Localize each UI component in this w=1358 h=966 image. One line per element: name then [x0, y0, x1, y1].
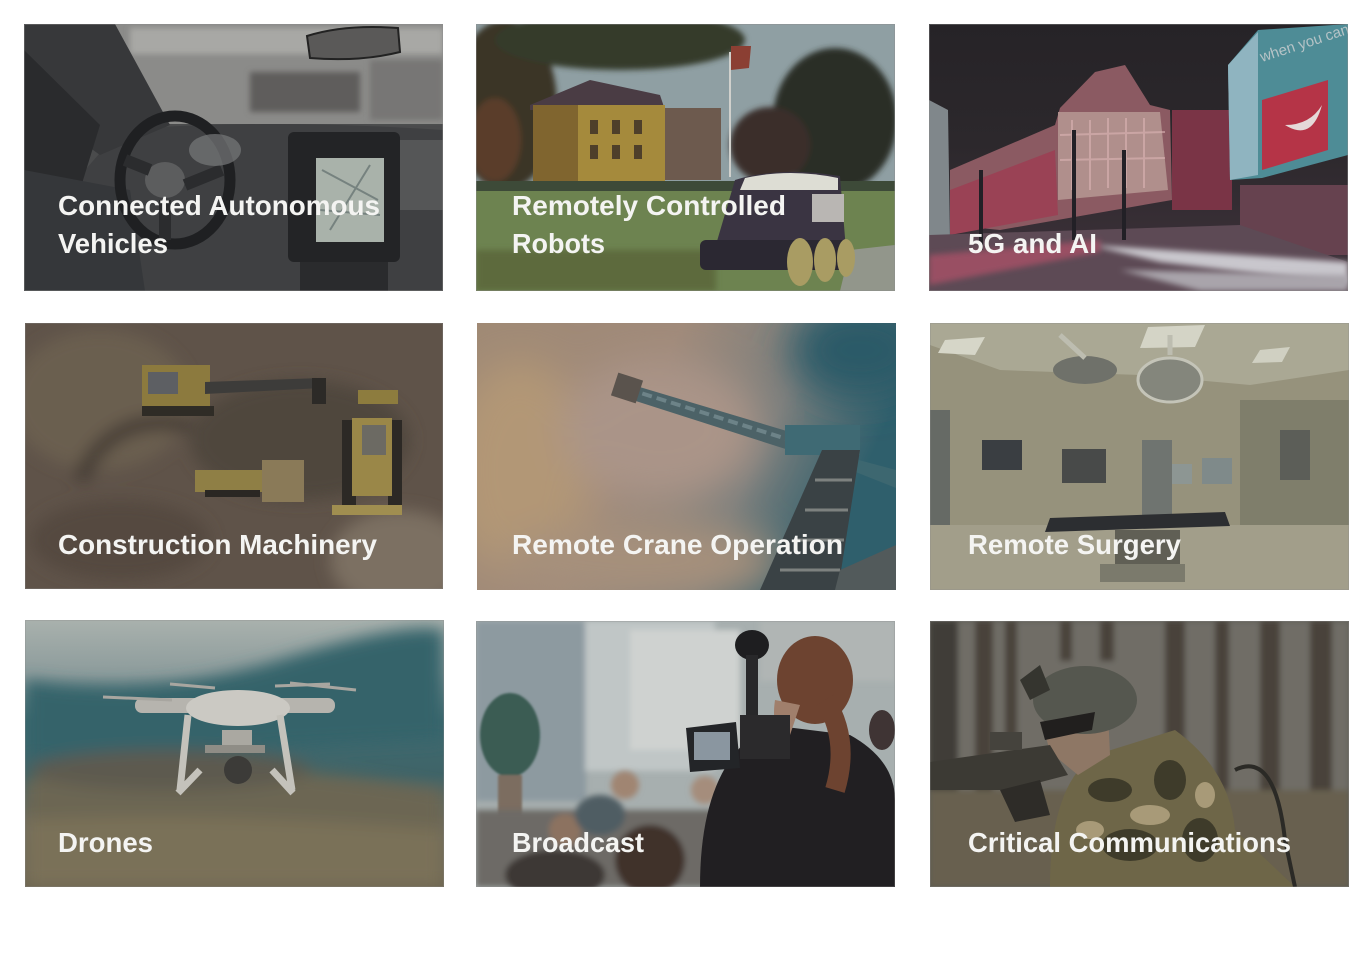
photo: lawn	[476, 181, 895, 291]
photo: crane tower	[760, 450, 896, 590]
photo: rear-view mirror	[307, 27, 400, 59]
photo: backpack antenna loop	[1235, 766, 1295, 887]
photo: excavator	[142, 365, 326, 416]
heading: Remote Crane Operation: Remote Crane Operation	[512, 529, 843, 560]
heading: Remotely Controlled Robots: Remotely Controlled	[512, 190, 786, 221]
photo: light trails on road	[929, 225, 1348, 291]
heading: 5G and AI: 5G and AI	[968, 228, 1097, 259]
photo: dirt terrain	[26, 334, 443, 589]
heading: Critical Communications: Critical Communications	[968, 827, 1291, 858]
photo: anaesthesia cart	[1142, 440, 1172, 515]
photo: centre touchscreen	[288, 132, 400, 262]
photo: foliage	[476, 24, 895, 181]
photo: digital billboards	[1228, 24, 1348, 255]
photo: forest trees	[930, 621, 1349, 887]
photo: instrument cluster	[189, 134, 241, 166]
photo: operating table	[1045, 512, 1230, 582]
photo: garage seen through windscreen	[110, 24, 443, 124]
heading: Connected Autonomous Vehicles: Vehicles	[58, 228, 168, 259]
photo: seated audience	[476, 771, 726, 900]
panel: Remotely Controlled Robots	[476, 24, 895, 291]
photo: ceiling	[930, 323, 1349, 385]
photo: bright room	[476, 621, 895, 801]
photo: bulldozer	[332, 390, 402, 515]
heading: Connected Autonomous Vehicles: Connected Autonomous	[58, 190, 380, 221]
panel: Construction Machinery	[25, 323, 443, 589]
photo: blurred hills	[25, 628, 444, 887]
photo: side wall and door	[930, 400, 1349, 525]
heading: Construction Machinery: Construction Machinery	[58, 529, 377, 560]
photo: delivery robot	[700, 172, 855, 286]
photo: plant	[480, 693, 540, 820]
panel: 5G and AI	[929, 21, 1351, 291]
photo: assault rifle	[930, 732, 1068, 822]
photo: yellow building	[530, 80, 721, 183]
photo: street poles	[981, 130, 1124, 250]
photo: flag	[729, 46, 751, 177]
panel: Broadcast	[476, 621, 895, 900]
heading: Connected Autonomous Vehicles	[58, 190, 380, 259]
panel: Remote Surgery	[930, 323, 1349, 590]
photo: soldier	[1020, 665, 1295, 887]
heading: Remotely Controlled Robots	[512, 190, 786, 259]
panel: Critical Communications	[930, 621, 1349, 887]
panel: Drones	[25, 620, 444, 887]
photo: crane jib	[611, 373, 896, 488]
photo: wall monitors	[982, 440, 1232, 484]
photo: camera operator	[700, 636, 895, 887]
photo: ornate building	[929, 65, 1232, 240]
photo: dashboard	[83, 124, 442, 290]
text: billboard lettering: when you can	[1257, 21, 1351, 66]
photo: video camera rig	[686, 630, 895, 772]
photo: surgical lights	[1053, 335, 1202, 402]
heading: Remotely Controlled Robots: Robots	[512, 228, 605, 259]
photo: wheel loader	[195, 460, 304, 502]
photo: floor	[930, 525, 1349, 590]
heading: Remote Surgery: Remote Surgery	[968, 529, 1181, 560]
panel: Connected Autonomous Vehicles	[24, 24, 443, 291]
photo: hazy sky	[477, 323, 896, 590]
panel: Remote Crane Operation	[477, 323, 896, 590]
heading: Drones: Drones	[58, 827, 153, 858]
photo: steering wheel	[120, 116, 230, 244]
photo: quadcopter drone	[103, 683, 356, 793]
heading: Broadcast: Broadcast	[512, 827, 644, 858]
